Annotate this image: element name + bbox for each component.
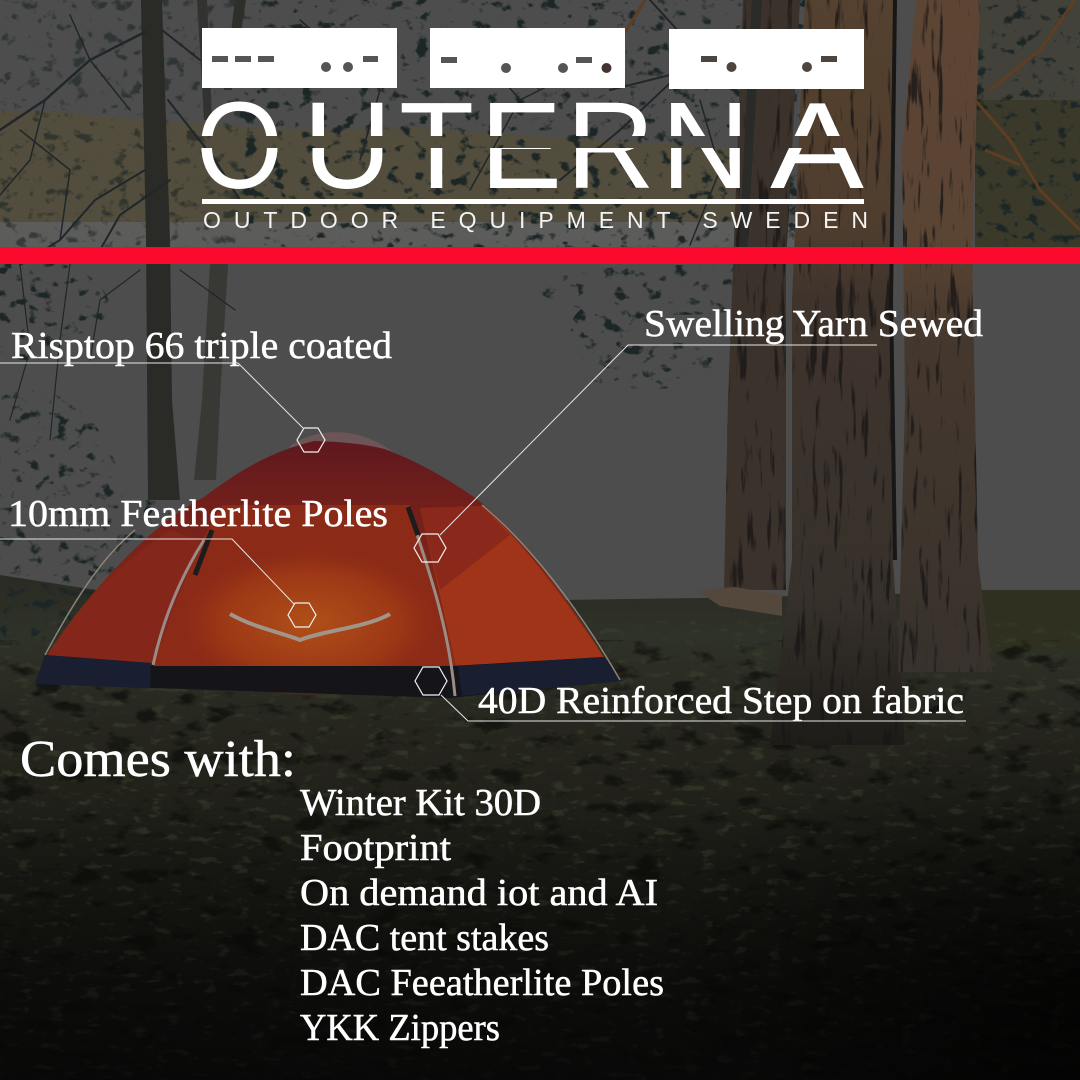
heading: comes with: Comes with: bbox=[20, 731, 296, 788]
callout: Risptop 66 triple coated bbox=[0, 325, 392, 452]
left tree branches bbox=[0, 0, 800, 440]
canopy foliage bbox=[240, 0, 810, 247]
callout: Risptop 66 triple coated: Risptop 66 triple coated bbox=[11, 325, 392, 367]
list: included items: DAC Feeatherlite Poles bbox=[300, 962, 664, 1004]
right pine canopy bbox=[975, 0, 1080, 247]
logo wordmark bbox=[201, 102, 864, 189]
tent fly bbox=[40, 441, 612, 682]
left tree trunks bbox=[141, 0, 180, 500]
morse box 2 bbox=[430, 28, 625, 88]
logo rule bbox=[202, 199, 864, 204]
callout: 40D Reinforced Step on fabric bbox=[415, 667, 966, 722]
ground bbox=[0, 575, 1080, 1080]
logo wordmark: O bbox=[196, 78, 283, 215]
tent right panel bbox=[420, 506, 604, 666]
orange pine branches bbox=[590, 0, 1080, 230]
list: included items bbox=[300, 782, 664, 1049]
callout: 10mm Featherlite Poles: 10mm Featherlite Poles bbox=[8, 493, 388, 535]
red divider bar bbox=[0, 247, 1080, 264]
logo wordmark: UTERN bbox=[303, 78, 750, 215]
big tree trunks bbox=[724, 0, 800, 590]
callout: Swelling Yarn Sewed: Swelling Yarn Sewed bbox=[644, 303, 983, 345]
tent left panel bbox=[47, 530, 200, 664]
list: included items: Winter Kit 30D bbox=[300, 782, 541, 824]
ground texture bbox=[0, 620, 1080, 1080]
callout: 10mm Featherlite Poles bbox=[0, 493, 388, 627]
sky bbox=[0, 0, 1080, 640]
callout: Swelling Yarn Sewed bbox=[414, 303, 983, 562]
morse code panels bbox=[202, 28, 864, 89]
morse box 3 bbox=[669, 29, 864, 89]
logo wordmark: A bbox=[770, 78, 864, 215]
list: included items: YKK Zippers bbox=[300, 1007, 500, 1049]
list: included items: Footprint bbox=[300, 827, 451, 869]
tent front panel bbox=[155, 505, 452, 668]
driftwood log bbox=[696, 587, 782, 616]
list: included items: On demand iot and AI bbox=[300, 872, 658, 914]
tent bbox=[35, 432, 622, 698]
morse box 1 bbox=[202, 28, 397, 88]
list: included items: DAC tent stakes bbox=[300, 917, 549, 959]
logo tagline: OUTDOOR EQUIPMENT SWEDEN bbox=[203, 207, 868, 233]
callout: 40D Reinforced Step on fabric: 40D Reinforced Step on fabric bbox=[478, 680, 964, 722]
tent poles and door zip bbox=[153, 507, 455, 696]
far shoreline forest bbox=[0, 112, 780, 225]
tent bottom band bbox=[35, 655, 622, 698]
tent inner roof bbox=[290, 432, 398, 462]
